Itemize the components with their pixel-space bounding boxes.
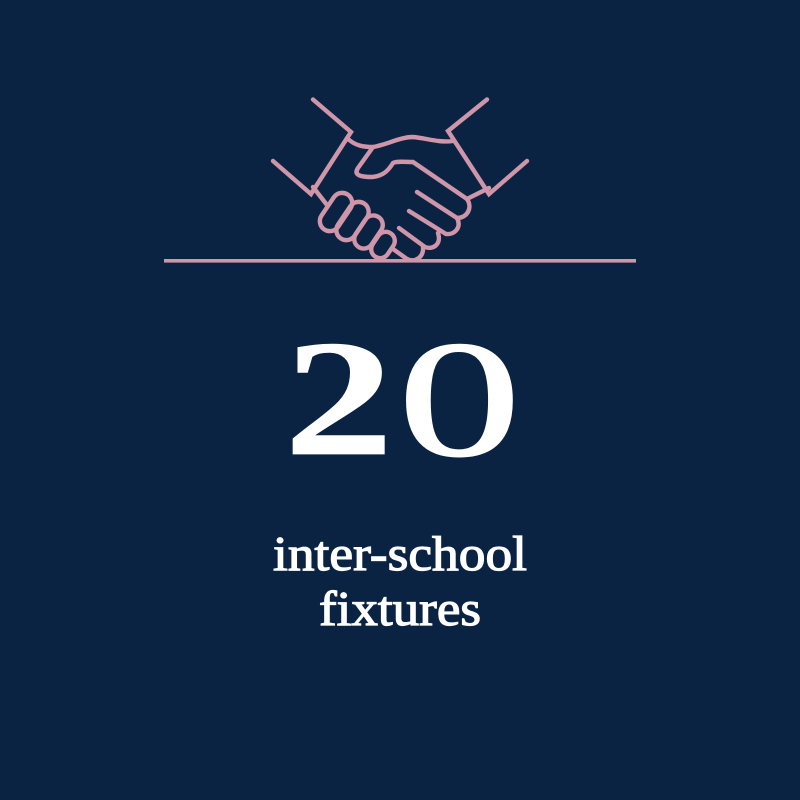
icon: handshake — [273, 100, 527, 262]
right cuff — [448, 100, 527, 194]
right hand fingers — [393, 192, 469, 260]
left wrist — [313, 187, 327, 205]
big number: 20: 2 — [284, 307, 394, 491]
left cuff — [273, 100, 351, 194]
caption: inter-school fixtures: inter-school — [273, 526, 527, 581]
top of hands and thumb — [347, 137, 489, 199]
big number: 20 — [284, 307, 521, 491]
left hand knuckles — [316, 189, 398, 262]
big number: 20: 0 — [398, 308, 521, 491]
caption: inter-school fixtures — [273, 526, 527, 636]
caption: inter-school fixtures: fixtures — [319, 581, 481, 636]
divider line — [164, 259, 636, 263]
